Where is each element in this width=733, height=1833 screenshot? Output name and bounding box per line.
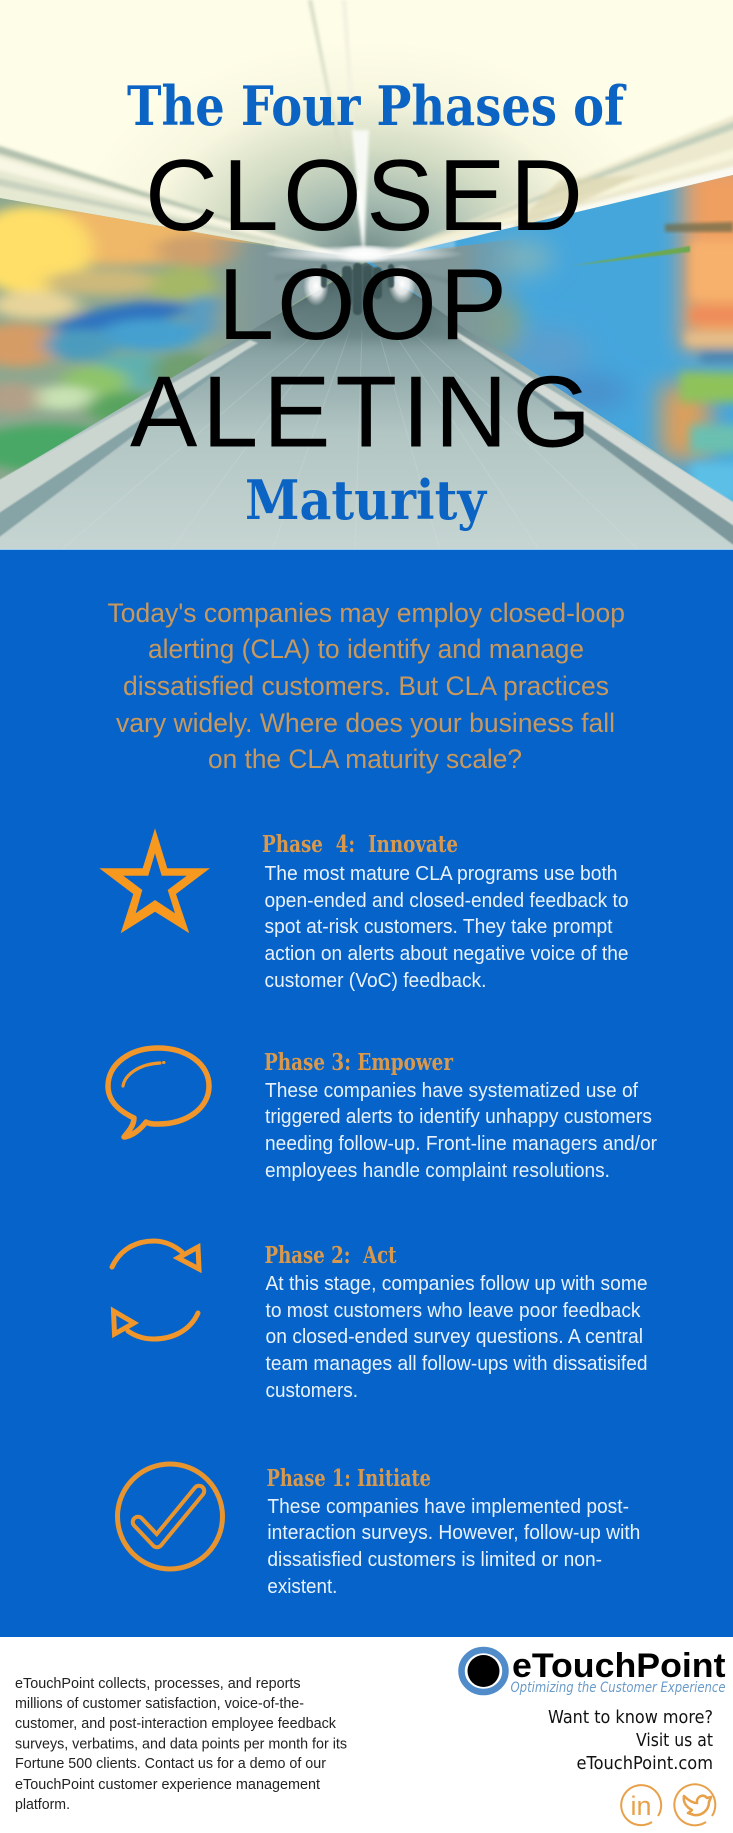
icon: linkedin [621,1785,661,1825]
company description: surveys, verbatims, and data points per month for its [15,1736,347,1752]
phase 3 heading: Phase 3: Empower [264,1049,454,1076]
company description: platform. [15,1796,70,1813]
phase 4 heading: Phase 4: Innovate [262,831,458,858]
tunnel side walls [205,238,366,360]
floor [0,262,733,560]
phase 2 description: customers. [266,1380,358,1402]
phase 2 heading: Phase 2: Act [264,1242,397,1269]
phase 1 heading: Phase 1: Initiate [266,1465,431,1492]
phase 1 description: existent. [267,1576,337,1598]
phase 1 block [266,1465,640,1598]
phase 3 description: These companies have systematized use of [265,1080,638,1102]
intro paragraph [108,598,625,774]
tunnel glow and floor [270,262,460,340]
heading: ALETING: ALETING [130,356,591,468]
icon: cycle arrows [112,1241,199,1339]
icon: speech bubble [108,1048,209,1137]
phase 1 description: These companies have implemented post- [267,1496,629,1518]
intro paragraph: alerting (CLA) to identify and manage [148,634,584,664]
phase 3 description: triggered alerts to identify unhappy customers [265,1106,652,1128]
hero photo: blurred tunnel background [0,0,733,560]
phase 4 description: action on alerts about negative voice of the [264,943,628,965]
icon: check mark in circle [118,1464,222,1569]
phase 4 description: spot at-risk customers. They take prompt [264,916,613,938]
intro paragraph: Today's companies may employ closed-loop [108,598,625,628]
heading: The Four Phases of: The Four Phases of [127,74,627,138]
heading: CLOSED: CLOSED [145,140,583,252]
call to action: eTouchPoint.com [576,1753,713,1774]
company description: Fortune 500 clients. Contact us for a demo of our [15,1755,326,1772]
company description: customer, and post-interaction employee feedback [15,1715,336,1732]
phase 1 description: dissatisfied customers is limited or non- [267,1549,602,1571]
heading: LOOP: LOOP [218,249,507,361]
phase 3 description: needing follow-up. Front-line managers and/or [265,1133,657,1155]
phase 2 description: on closed-ended survey questions. A central [266,1326,643,1348]
call to action: Visit us at [636,1730,713,1751]
phase 2 description [266,1273,648,1402]
company description: eTouchPoint collects, processes, and reports [15,1675,301,1692]
rails [0,327,733,552]
intro paragraph: vary widely. Where does your business fall [116,708,615,738]
phase 2 description: team manages all follow-ups with dissatisifed [266,1353,648,1375]
phase 1 description [267,1496,640,1598]
panel: white footer [0,1637,733,1833]
call to action [548,1707,713,1774]
phase 4 description: customer (VoC) feedback. [264,970,486,992]
intro paragraph: dissatisfied customers. But CLA practices [123,671,609,701]
phase 4 description: The most mature CLA programs use both [264,863,618,885]
icon: star [99,828,210,933]
phase 4 block [262,831,628,992]
company description: eTouchPoint customer experience management [15,1776,321,1793]
phase 1 description: interaction surveys. However, follow-up with [267,1522,640,1544]
logo mark [462,1650,506,1692]
company description: millions of customer satisfaction, voice-of-the- [15,1695,304,1712]
phase 3 block [264,1049,657,1182]
intro paragraph: on the CLA maturity scale? [208,744,522,774]
heading: Maturity: Maturity [245,468,487,532]
phase 4 description: open-ended and closed-ended feedback to [264,890,628,912]
silhouettes of people in tunnel [321,263,394,315]
phase 3 description: employees handle complaint resolutions. [265,1160,610,1182]
left wall [0,190,370,490]
call to action: Want to know more? [548,1707,713,1728]
floor lines [60,320,640,551]
panel: blue phases section [0,550,733,1637]
company description [15,1675,347,1813]
icon: linkedin: in [630,1791,652,1821]
logo wordmark: eTouchPoint [512,1647,726,1685]
logo: eTouchPoint [462,1647,726,1696]
phase 2 block [264,1242,648,1402]
icon: twitter [674,1784,715,1825]
phase 4 description [264,863,628,992]
right wall [366,160,733,510]
wall streaks [275,240,455,286]
phase 2 description: At this stage, companies follow up with some [266,1273,648,1295]
phase 2 description: to most customers who leave poor feedback [266,1300,641,1322]
phase 3 description [265,1080,657,1182]
ceiling bands [0,0,733,262]
